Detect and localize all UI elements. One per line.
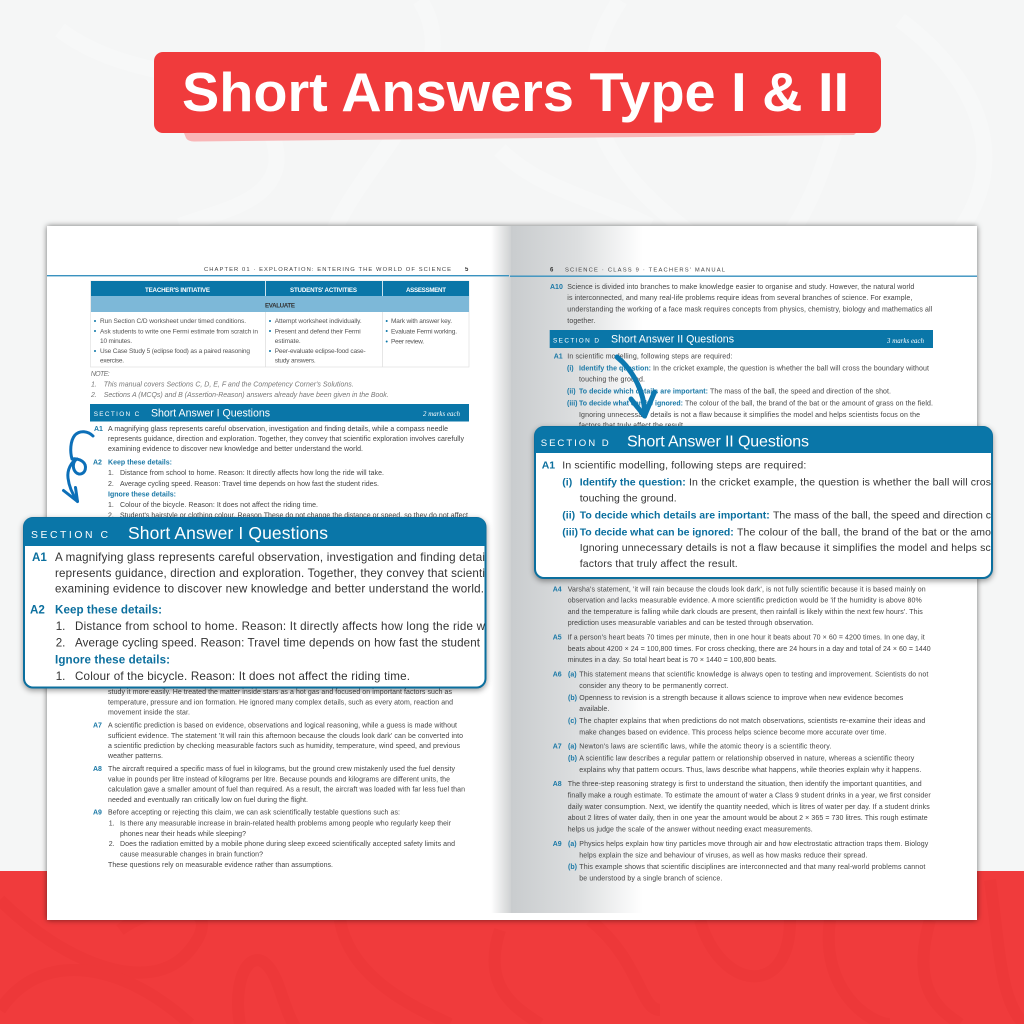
callout C header: Short Answer I Questions <box>128 523 328 543</box>
callout D header: Short Answer II Questions <box>627 434 809 450</box>
title text: Short Answers Type I & II <box>182 61 849 123</box>
right page answers A7 to A9: (b) <box>568 864 577 871</box>
evaluate table: Evaluate Fermi working. <box>391 328 457 336</box>
callout D answer text: The mass of the ball, the speed and direction c <box>773 509 991 521</box>
evaluate table: estimate. <box>275 338 301 345</box>
right page answer A1: Identify the question: <box>579 366 651 372</box>
background: red lower band <box>0 871 1024 1024</box>
right page answers A4 to A6: If a person's heart beats 70 times per minute, then in one hour it beats about 70 × 60 = 4200 times. In one day, it <box>568 634 925 642</box>
callout D answer text: (i) <box>562 477 572 489</box>
right page answers A7 to A9: explains why that pattern occurs. Thus, laws describe what happens, while theories explain why it happens. <box>579 767 921 774</box>
right page answers A7 to A9: helps us judge the scale of the answer without needing exact measurements. <box>568 826 813 834</box>
evaluate table: exercise. <box>100 358 124 364</box>
right page answers A7 to A9: Physics helps explain how tiny particles move through air and how electrostatic attraction traps them. Biology <box>579 841 929 848</box>
right page answers A4 to A6: The chapter explains that when predictions do not match observations, scientists re-examine their ideas and <box>579 718 925 725</box>
right page answers A4 to A6: This statement means that scientific knowledge is always open to testing and improvement. Scientists do not <box>579 672 928 678</box>
right page answers A7 to A9: This example shows that scientific disciplines are interconnected and that many real-world problems cannot <box>579 864 925 871</box>
note <box>90 371 389 399</box>
left page answers A1 A2: 2. <box>108 481 114 488</box>
evaluate table: 10 minutes. <box>100 338 132 345</box>
left page answers A6 to A9: study it more easily. He treated the matter inside stars as a hot gas and focused on important factors such as <box>108 689 452 696</box>
callout D answer text: touching the ground. <box>580 492 677 504</box>
right page answer A1: To decide what can be ignored: <box>579 400 683 408</box>
right page answer A1: (i) <box>567 366 574 372</box>
right page answers A7 to A9: A scientific law describes a regular pattern or relationship observed in nature, whereas a scientific theory <box>579 756 915 762</box>
callout D answer text: factors that truly affect the result. <box>580 558 738 570</box>
evaluate table: Run Section C/D worksheet under timed conditions. <box>100 318 246 325</box>
left page answers A1 A2: Average cycling speed. Reason: Travel time depends on how fast the student rides. <box>120 481 379 488</box>
callout C header <box>24 518 486 546</box>
left page answers A1 A2: 1. <box>108 502 114 509</box>
callout C answer text: A2 <box>30 603 45 616</box>
left page answers A6 to A9: Does the radiation emitted by a mobile phone during sleep exceed scientifically accepted safety limits and <box>120 841 455 848</box>
right page answers A7 to A9: finally make a rough estimate. To estimate the amount of water a Class 9 student drinks in a year, we first consider <box>568 792 931 800</box>
right page answers A4 to A6: A6 <box>553 672 562 678</box>
answer A10: Science is divided into branches to make knowledge easier to organise and study. However, the natural world <box>567 284 914 291</box>
right page answer A1 <box>554 354 933 430</box>
callout D header <box>535 427 992 453</box>
right page answers A4 to A6: observation and lacks measurable evidence. A more scientific prediction would be 'if the humidity is above 80% <box>568 598 922 604</box>
note: Sections A (MCQs) and B (Assertion-Reason) answers already have been given in the Book. <box>104 392 389 399</box>
left page answers A6 to A9: 2. <box>109 841 115 848</box>
callout D answer text <box>542 460 991 570</box>
left page answers A1 A2: A magnifying glass represents careful observation, investigation and finding details, while a compass needle <box>108 426 448 433</box>
callout: section C <box>24 518 486 688</box>
left page answers A6 to A9: A9 <box>93 810 102 816</box>
arrow: blue arrow to section D callout <box>617 357 654 416</box>
note: 1. <box>91 382 97 388</box>
callout D answer text: A1 <box>542 460 555 472</box>
left page answers A6 to A9: Before accepting or rejecting this claim, we can ask scientifically testable questions such as: <box>108 810 400 816</box>
evaluate table: Present and defend their Fermi <box>275 328 361 336</box>
callout C answer text: A1 <box>32 551 47 564</box>
right page answers A7 to A9: The three-step reasoning strategy is first to understand the situation, then identify the important quantities, and <box>568 781 922 788</box>
right page answers A7 to A9: be understood by a single branch of science. <box>579 876 722 882</box>
left page running header: CHAPTER 01 · EXPLORATION: ENTERING THE WORLD OF SCIENCE <box>204 267 451 273</box>
left page answers A6 to A9: These questions rely on measurable evidence rather than assumptions. <box>108 862 333 869</box>
left page answers A6 to A9: weather patterns. <box>107 753 163 760</box>
callout D header: SECTION D <box>541 438 609 449</box>
right page answer A1: (ii) <box>567 388 576 396</box>
right page answers A7 to A9: (a) <box>568 841 577 848</box>
callout C header: SECTION C <box>31 530 108 541</box>
left page answers A6 to A9: needed and eventually ran critically low on fuel during the flight. <box>108 797 308 804</box>
left page answers A1 A2: Keep these details: <box>108 460 172 466</box>
right page answers A7 to A9: A7 <box>553 744 562 750</box>
right page answers A7 to A9: about 2 litres of water daily, then in one year the amount would be about 2 × 365 = 730 litres. This rough estimate <box>568 815 928 822</box>
evaluate table: TEACHER'S INITIATIVE <box>145 287 210 294</box>
section c bar: SECTION C <box>94 411 140 418</box>
callout C answer text: 1. <box>56 670 65 683</box>
right page running header: SCIENCE · CLASS 9 · TEACHERS' MANUAL <box>565 268 726 274</box>
left page answers A6 to A9: value in pounds per litre instead of kilograms per litre. Because pounds and kilograms are different units, the <box>108 776 450 784</box>
right page answers A7 to A9: helps explain the size and behaviour of viruses, as well as how masks reduce their spread. <box>579 852 867 860</box>
note: 2. <box>90 392 97 399</box>
right page answers A4 to A6: Varsha's statement, 'it will rain because the clouds look dark', is not fully scientific because it is based mainly on <box>568 586 926 594</box>
right page <box>550 268 933 882</box>
callout C answer text <box>30 551 486 683</box>
evaluate table: Use Case Study 5 (eclipse food) as a paired reasoning <box>100 348 250 355</box>
left page answers A1 A2: represents guidance, direction and exploration. Together, they convey that scientific exploration involves carefully <box>108 436 464 443</box>
callout D answer text: The colour of the ball, the brand of the bat or the amo <box>737 526 991 538</box>
left page <box>90 267 469 869</box>
right page answers A4 to A6: make changes based on evidence. This process helps science become more accurate over time. <box>579 730 886 736</box>
right page answers A4 to A6 <box>553 586 931 736</box>
left page answers A1 A2: Distance from school to home. Reason: It directly affects how long the ride will take. <box>120 470 384 477</box>
callout C answer text: represents guidance, direction and exploration. Together, they convey that scienti <box>55 567 485 580</box>
right page answers A7 to A9: A9 <box>553 841 562 848</box>
left page answers A6 to A9: A scientific prediction is based on evidence, observations and logical reasoning, while a guess is made without <box>108 722 457 730</box>
section c bar: 2 marks each <box>423 411 461 418</box>
right page answers A7 to A9: Newton's laws are scientific laws, while the atomic theory is a scientific theory. <box>579 744 831 750</box>
right page answers A4 to A6: (b) <box>568 695 577 702</box>
callout C answer text: 2. <box>56 637 65 650</box>
right page answer A1: (iii) <box>567 400 578 408</box>
right page answer A1: The mass of the ball, the speed and direction of the shot. <box>710 388 891 396</box>
right page answers A4 to A6: A5 <box>553 634 562 642</box>
right page running header: 6 <box>550 268 554 274</box>
left page answers A6 to A9: phones near their heads while sleeping? <box>120 831 246 838</box>
right page answers A7 to A9: daily water consumption. Next, we identify the quantity needed, which is litres of water per day. If a student drinks <box>568 804 930 811</box>
left page answers A1 A2: A1 <box>94 426 103 433</box>
open book <box>47 226 977 920</box>
left page answers A6 to A9: cause measurable changes in brain function? <box>120 852 263 858</box>
section d bar: SECTION D <box>553 338 599 344</box>
left page answers A1 A2: Colour of the bicycle. Reason: It does not affect the riding time. <box>120 502 318 509</box>
right page answer A1: In scientific modelling, following steps are required: <box>567 354 732 360</box>
callout C answer text: Average cycling speed. Reason: Travel time depends on how fast the student <box>75 637 481 650</box>
callout C answer text: Ignore these details: <box>55 653 170 666</box>
right page answers A4 to A6: minutes in a day. So total heart beat is 70 × 1440 = 100,800 beats. <box>568 657 777 664</box>
callout D answer text: Identify the question: <box>580 477 686 489</box>
left page answers A6 to A9: calculation gave a smaller amount of fuel than required. As a result, the aircraft was loaded with far less fuel than <box>108 786 465 794</box>
callout C answer text: 1. <box>56 620 65 633</box>
callout D answer text: (iii) <box>562 526 578 538</box>
section d bar <box>550 330 933 348</box>
callout C answer text: A magnifying glass represents careful observation, investigation and finding detai <box>55 551 485 564</box>
evaluate table: STUDENTS' ACTIVITIES <box>290 287 357 294</box>
left page answers A6 to A9: A8 <box>93 766 102 773</box>
right page answers A7 to A9: (b) <box>568 756 577 762</box>
left page answers A6 to A9: temperature, pressure and ion formation. He ignored many complex details, such as every atom, reaction and <box>108 700 453 706</box>
evaluate table: ASSESSMENT <box>406 287 446 294</box>
callout D answer text: To decide what can be ignored: <box>580 526 734 538</box>
section d bar: 3 marks each <box>886 338 925 345</box>
callout D answer text: In the cricket example, the question is whether the ball will cros <box>689 477 991 489</box>
right page answers A4 to A6: available. <box>579 706 609 713</box>
right page answers A7 to A9: A8 <box>553 781 562 788</box>
right page answer A1: touching the ground. <box>579 376 645 384</box>
callout C answer text: Distance from school to home. Reason: It directly affects how long the ride w <box>75 620 486 633</box>
right page answer A1: factors that truly affect the result. <box>579 422 685 430</box>
evaluate table: Mark with answer key. <box>391 318 452 325</box>
right page answers A7 to A9 <box>553 744 931 882</box>
evaluate table: Ask students to write one Fermi estimate from scratch in <box>100 328 258 336</box>
right page answer A1: In the cricket example, the question is whether the ball will cross the boundary without <box>653 366 929 372</box>
callout D answer text: To decide which details are important: <box>580 509 770 521</box>
answer A10: is interconnected, and many real-life problems require ideas from several branches of science. For example, <box>567 295 912 302</box>
right page answer A1: Ignoring unnecessary details is not a flaw because it simplifies the model and helps scientists focus on the <box>579 412 920 419</box>
callout D answer text: (ii) <box>562 509 575 521</box>
evaluate table: study answers. <box>275 358 316 364</box>
answer A10: understanding the working of a face mask requires concepts from physics, chemistry, biology and mathematics all <box>567 306 933 314</box>
answer A10: together. <box>567 318 595 325</box>
left page answers A6 to A9: 1. <box>109 820 115 828</box>
right page answers A4 to A6: (a) <box>568 672 577 678</box>
left page answers A1 A2: Ignore these details: <box>108 492 176 498</box>
right page answers A4 to A6: beats about 4200 × 24 = 100,800 times. For cross checking, there are 24 hours in a day and total of 24 × 60 = 1440 <box>568 646 931 653</box>
answer A10 <box>550 284 933 325</box>
note: This manual covers Sections C, D, E, F and the Competency Corner's Solutions. <box>104 382 354 388</box>
left page answers A6 to A9: Is there any measurable increase in brain-related health problems among people who regularly keep their <box>120 820 452 828</box>
left page answers A6 to A9 <box>93 689 465 869</box>
section c bar: Short Answer I Questions <box>151 408 270 420</box>
title banner <box>154 52 881 142</box>
callout C answer text: examining evidence to discover new knowledge and better understand the world. <box>55 583 484 596</box>
left page answers A6 to A9: The aircraft required a specific mass of fuel in kilograms, but the ground crew mistakenly used the fuel density <box>108 766 456 773</box>
callout D answer text: Ignoring unnecessary details is not a flaw because it simplifies the model and helps sc <box>580 542 991 554</box>
right page answers A7 to A9: (a) <box>568 744 577 750</box>
left page answers A1 A2: A2 <box>93 460 102 466</box>
section c bar <box>90 404 469 422</box>
callout C answer text: Keep these details: <box>55 603 162 616</box>
answer A10: A10 <box>550 284 563 291</box>
right page answer A1: The colour of the ball, the brand of the bat or the amount of grass on the field. <box>685 400 933 408</box>
note: NOTE: <box>91 371 110 378</box>
right page answers A4 to A6: prediction uses measurable variables and can be tested through observation. <box>568 620 814 627</box>
left page answers A6 to A9: a scientific prediction by checking measurable factors such as humidity, temperature, wind speed, and previous <box>108 743 460 750</box>
left page answers A1 A2: examining evidence to discover new knowledge and better understand the world. <box>108 446 363 453</box>
left page answers A6 to A9: A7 <box>93 722 102 730</box>
right page answers A4 to A6: consider any theory to be permanently correct. <box>579 683 728 690</box>
right page answer A1: A1 <box>554 354 563 360</box>
arrow: curly blue arrow to section C callout <box>64 432 93 502</box>
callout D answer text: In scientific modelling, following steps are required: <box>562 460 806 472</box>
evaluate table <box>90 281 469 367</box>
left page answers A1 A2: Student's hairstyle or clothing colour. Reason These do not change the distance or speed, so they do not affect <box>120 512 468 520</box>
left page running header: 5 <box>465 267 469 273</box>
evaluate table: EVALUATE <box>265 302 295 310</box>
right page answer A1: To decide which details are important: <box>579 388 708 396</box>
left page answers A1 A2: 2. <box>108 512 114 520</box>
right page answers A4 to A6: and the temperature is falling while dark clouds are present, then rainfall is likely within the next few hours'. This <box>568 609 923 616</box>
right page answers A4 to A6: Openness to revision is a strength because it allows science to improve when new evidence becomes <box>579 695 904 702</box>
left page answers A6 to A9: sufficient evidence. The statement 'It will rain this afternoon because the clouds look dark' can be converted into <box>108 733 463 740</box>
evaluate table: Attempt worksheet individually. <box>275 318 362 325</box>
left page answers A6 to A9: movement inside the star. <box>108 710 190 716</box>
evaluate table: Peer review. <box>391 339 424 346</box>
left page answers A1 A2: 1. <box>108 470 114 477</box>
callout C answer text: Colour of the bicycle. Reason: It does not affect the riding time. <box>75 670 410 683</box>
callout: section D <box>535 427 992 578</box>
right page answers A4 to A6: (c) <box>568 718 577 725</box>
evaluate table: Peer-evaluate eclipse-food case- <box>275 348 366 355</box>
section d bar: Short Answer II Questions <box>611 334 734 346</box>
right page answers A4 to A6: A4 <box>553 586 562 594</box>
left page answers A1 A2 <box>93 426 468 520</box>
